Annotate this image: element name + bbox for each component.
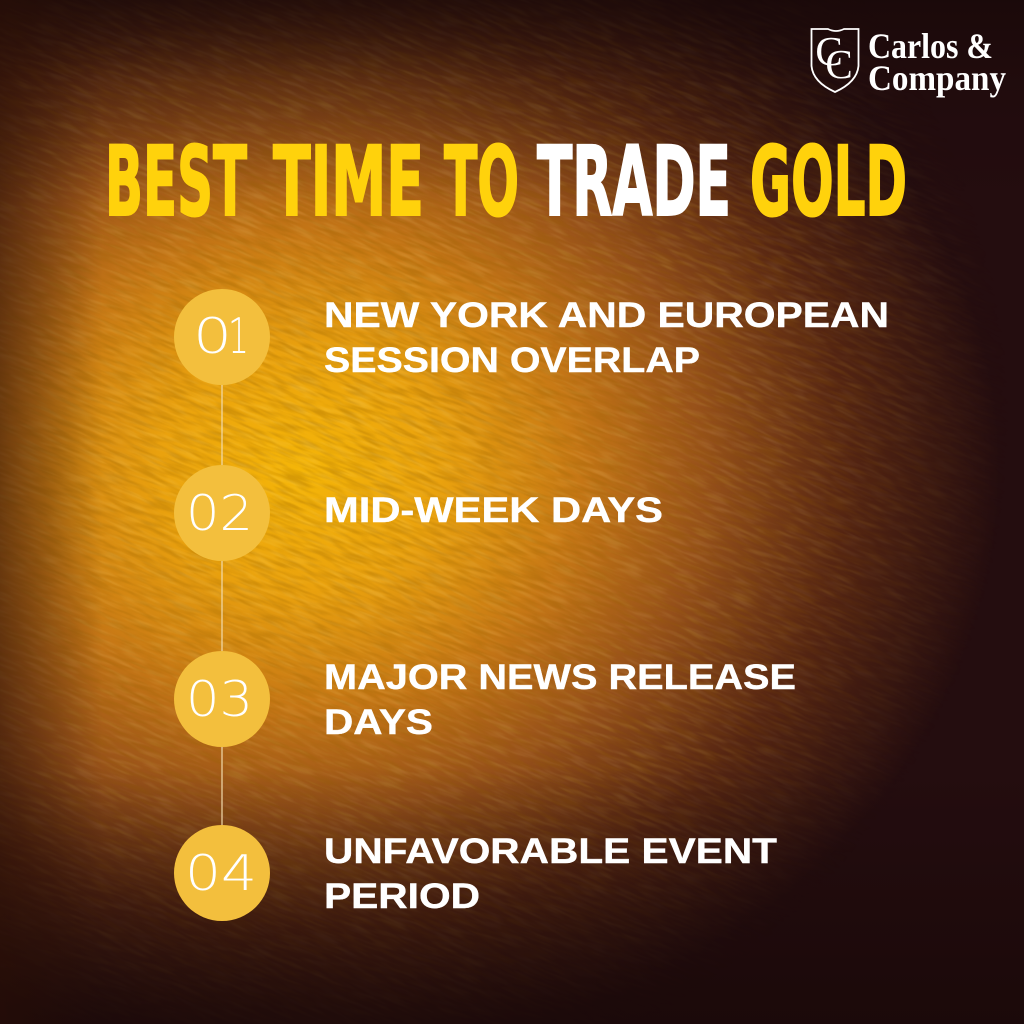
step 04: [174, 825, 777, 921]
step 02: [174, 465, 663, 561]
step 04 label: UNFAVORABLE EVENT: [324, 832, 777, 871]
icon: CC shield crest: C: [815, 28, 843, 74]
title: TIME: [273, 126, 424, 238]
step 01 label: SESSION OVERLAP: [324, 341, 700, 380]
logo wordmark: [868, 26, 1006, 98]
logo: Carlos & Company: [812, 26, 1006, 98]
step 03 label: [324, 658, 796, 742]
number badge 03: 03: [186, 671, 253, 728]
number badge 01: [174, 289, 270, 385]
title: BEST: [105, 126, 247, 238]
number badge 02: 02: [186, 485, 253, 542]
title: TRADE: [537, 126, 731, 238]
step 02 label: MID-WEEK DAYS: [324, 491, 663, 530]
number badge 01: 1: [228, 308, 249, 365]
step 03: [174, 651, 796, 747]
step 01 label: [324, 296, 889, 380]
logo wordmark: Company: [868, 58, 1006, 98]
title: TO: [444, 126, 519, 238]
step 01: [174, 289, 889, 385]
step 04 label: PERIOD: [324, 877, 480, 916]
number badge 02: [174, 465, 270, 561]
title: [105, 126, 907, 238]
icon: CC shield crest: C: [825, 41, 853, 87]
logo wordmark: Carlos &: [868, 26, 993, 66]
step 03 label: MAJOR NEWS RELEASE: [324, 658, 796, 697]
step 04 label: [324, 832, 777, 916]
step 01 label: NEW YORK AND EUROPEAN: [324, 296, 889, 335]
number badge 03: [174, 651, 270, 747]
timeline connector lines: [221, 385, 223, 826]
number badge 04: [174, 825, 270, 921]
number badge 01: 0: [193, 308, 232, 365]
number badge 04: 04: [185, 845, 257, 902]
icon: CC shield crest: [812, 28, 858, 92]
step 03 label: DAYS: [324, 703, 433, 742]
